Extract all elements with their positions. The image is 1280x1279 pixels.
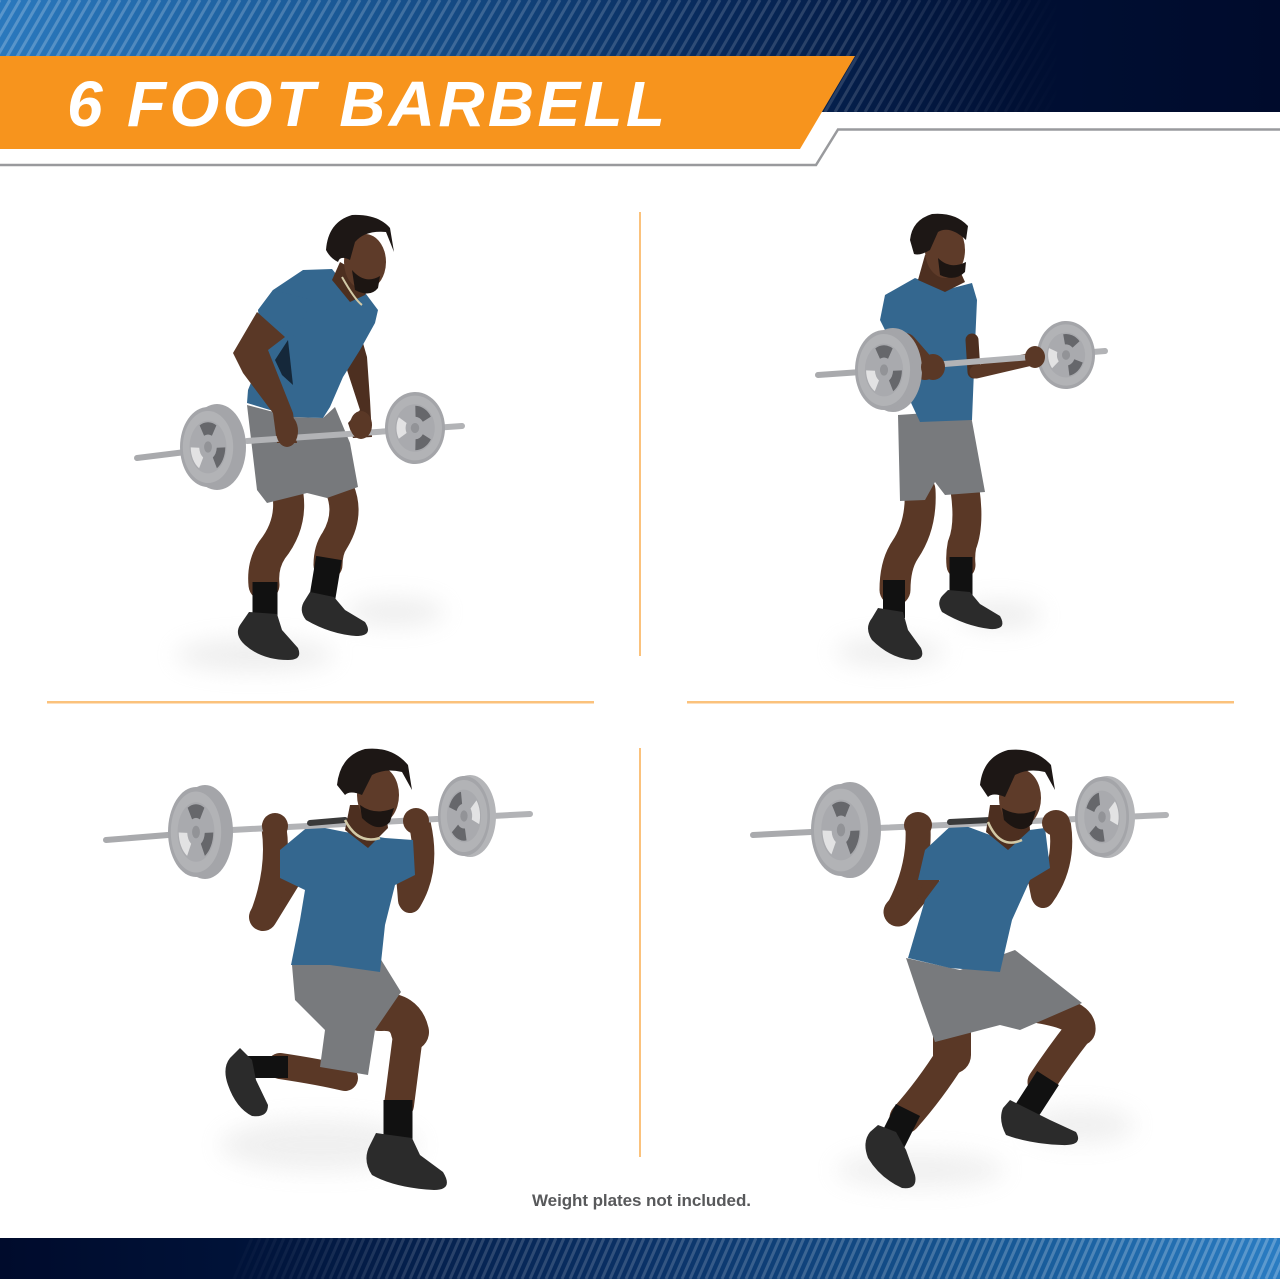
figure: barbell curl [818, 214, 1105, 666]
footer band [0, 1238, 1280, 1279]
shirt [247, 269, 378, 418]
head [337, 749, 412, 848]
plate left [168, 785, 233, 879]
barbell [753, 815, 1166, 835]
floor shadow [835, 1107, 1135, 1188]
shorts [906, 950, 1082, 1042]
title banner: 6 FOOT BARBELL [67, 68, 665, 140]
shorts [292, 958, 401, 1075]
shorts [898, 410, 985, 501]
shoes [865, 1100, 1078, 1188]
barbell [106, 814, 530, 840]
figure: squat [753, 750, 1166, 1188]
plate left [180, 404, 246, 490]
floor shadow [835, 601, 1042, 666]
figure: lunge [106, 749, 530, 1190]
front shoe [366, 1133, 447, 1190]
hands [904, 810, 1070, 838]
arms [897, 825, 1061, 912]
divider vertical top [639, 212, 641, 656]
left arm [233, 312, 297, 443]
right arm [347, 343, 372, 438]
head [326, 215, 394, 305]
head [910, 214, 968, 292]
plate right [1067, 766, 1137, 868]
plate left [855, 328, 922, 412]
footnote: Weight plates not included. [532, 1191, 751, 1210]
shoes [868, 590, 1002, 660]
front leg [380, 1012, 410, 1146]
plate left [811, 782, 881, 878]
shirt [880, 278, 977, 422]
legs [894, 490, 967, 618]
shirt shade [275, 340, 293, 385]
hands [921, 346, 1045, 380]
legs [892, 1008, 1080, 1142]
divider horizontal right [687, 701, 1234, 704]
floor shadow [175, 598, 445, 671]
hands [262, 808, 429, 839]
floor shadow [220, 1119, 420, 1171]
hands [276, 411, 372, 447]
back shoe [225, 1048, 268, 1116]
arm far [262, 825, 423, 917]
shoes [238, 592, 368, 660]
shorts [247, 405, 358, 503]
back leg [247, 1066, 345, 1078]
barbell [818, 351, 1105, 375]
divider vertical bottom [639, 748, 641, 1157]
head [980, 750, 1055, 850]
header outline [0, 130, 1280, 165]
plate right [431, 765, 497, 867]
divider horizontal left [47, 701, 594, 704]
title banner [0, 56, 855, 149]
plate right [374, 379, 456, 477]
sleeve [258, 290, 312, 337]
plate right [1029, 311, 1103, 399]
arms [905, 340, 1036, 372]
barbell [137, 426, 462, 458]
header band [0, 0, 1280, 112]
shirt [908, 822, 1050, 972]
figure: bent-over row [137, 215, 462, 671]
legs [264, 490, 344, 618]
shirt [280, 825, 415, 972]
